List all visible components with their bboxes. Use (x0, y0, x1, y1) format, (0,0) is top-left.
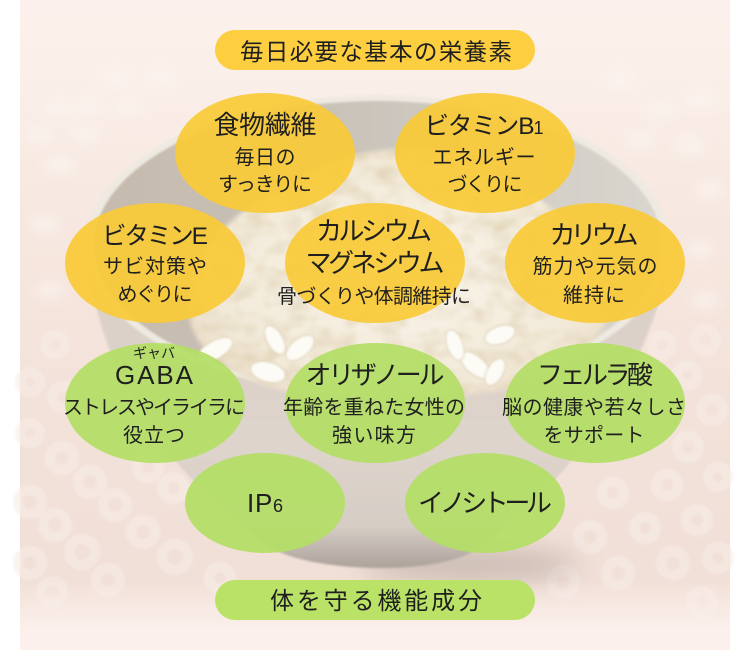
bubble: オリザノール (283, 343, 465, 463)
bubble: ビタミンE: サビ対策や (103, 255, 207, 278)
bubble: ビタミンB1: エネルギー (432, 146, 536, 169)
rice grains (193, 321, 518, 389)
bubble: 食物繊維: 食物繊維 (214, 110, 316, 140)
bubble: ビタミンB1: づくりに (448, 173, 522, 196)
bubble: ビタミンE (65, 203, 245, 323)
bubble: フェルラ酸: フェルラ酸 (537, 360, 653, 390)
bubble: GABA (63, 343, 245, 463)
bubble: ビタミンB1: ビタミンB1 (424, 112, 544, 140)
bubble: 食物繊維: 毎日の (234, 146, 296, 169)
bubble: IP6: IP6 (247, 488, 283, 518)
bowl shadow (360, 549, 580, 581)
rice grain texture (188, 149, 610, 400)
bowl body (88, 270, 668, 568)
bubble: ビタミンE: めぐりに (118, 284, 192, 306)
bubble: カリウム: 筋力や元気の (532, 255, 658, 278)
bubble: GABA: 役立つ (123, 424, 185, 447)
bubble: オリザノール: オリザノール (306, 360, 444, 390)
bubble: オリザノール: 年齢を重ねた女性の (283, 396, 465, 419)
bubble: カリウム: カリウム (550, 220, 638, 250)
bubble: イノシトール (405, 453, 565, 553)
bowl interior and rim (86, 95, 670, 395)
heading: 毎日必要な基本の栄養素 (215, 30, 535, 70)
heading: 体を守る機能成分: 体を守る機能成分 (270, 588, 482, 615)
bubble: オリザノール: 強い味方 (332, 424, 416, 447)
bubble: カルシウム マグネシウム: マグネシウム (306, 248, 444, 278)
bubble: カリウム: 維持に (563, 284, 625, 307)
bubble: GABA: ギャバ (133, 345, 175, 361)
bubble: カルシウム マグネシウム: 骨づくりや体調維持に (277, 285, 471, 308)
bubble: GABA: GABA (115, 360, 194, 390)
bubble: フェルラ酸 (502, 343, 686, 463)
bubble: IP6 (185, 453, 345, 553)
bubble: カリウム (505, 203, 685, 323)
bubble: 食物繊維 (175, 93, 355, 213)
bubble: ビタミンE: ビタミンE (102, 222, 208, 250)
rice mound (188, 149, 610, 400)
faint upper background dots (26, 71, 724, 308)
bubble: ビタミンB1 (395, 93, 575, 213)
bubble: フェルラ酸: 脳の健康や若々しさ (502, 396, 686, 419)
bubble: フェルラ酸: をサポート (544, 424, 644, 447)
rice bowl photo (86, 95, 670, 568)
bubble: 食物繊維: すっきりに (218, 174, 312, 196)
bubble: イノシトール: イノシトール (418, 488, 552, 518)
background dot pattern (18, 329, 729, 613)
heading: 毎日必要な基本の栄養素: 毎日必要な基本の栄養素 (240, 39, 512, 65)
bubble: カルシウム マグネシウム (277, 203, 471, 323)
heading: 体を守る機能成分 (215, 580, 535, 620)
bottom fade (20, 580, 730, 630)
bubble: GABA: ストレスやイライラに (63, 397, 245, 419)
bubble: カルシウム マグネシウム: カルシウム (316, 216, 432, 246)
